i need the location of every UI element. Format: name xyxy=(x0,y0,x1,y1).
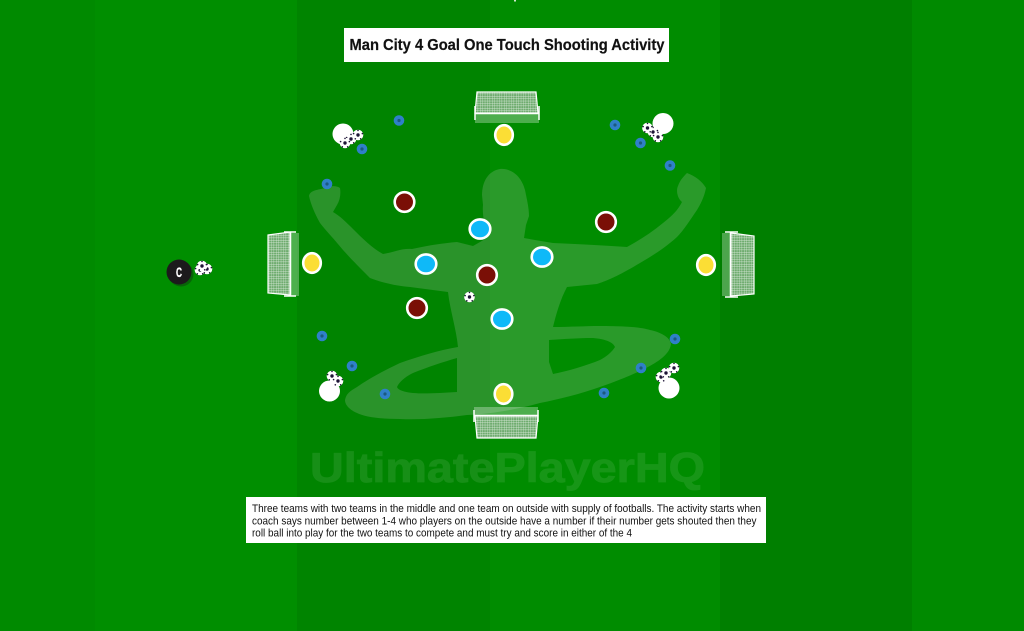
coach with balls xyxy=(166,260,212,286)
goal: right xyxy=(722,232,754,297)
goal: left xyxy=(268,232,299,296)
maroon team xyxy=(395,192,616,318)
description text box: roll ball into play for the two teams to compete and must try and score in either of the 4 xyxy=(252,528,632,540)
description text box: Three teams with two teams in the middle and one team on outside with supply of footballs. The activity starts when xyxy=(252,503,761,515)
watermark: player silhouette xyxy=(309,169,706,419)
description text box xyxy=(246,497,766,543)
outside player: top right with balls xyxy=(642,113,674,142)
goal: bottom xyxy=(474,407,538,438)
outside player: bottom right with balls xyxy=(656,363,680,398)
goal: top xyxy=(475,92,539,123)
description text box: coach says number between 1-4 who players on the outside have a number if their number gets shouted then they xyxy=(252,516,757,528)
watermark: UltimatePlayerHQ: UltimatePlayerHQ xyxy=(310,444,705,491)
blue team xyxy=(416,219,552,329)
match ball xyxy=(464,292,475,302)
title xyxy=(344,28,669,62)
outside player: bottom left with balls xyxy=(319,371,343,402)
title: Man City 4 Goal One Touch Shooting Activity xyxy=(350,37,665,54)
coach with balls: C xyxy=(176,264,182,280)
cones xyxy=(317,115,680,399)
outside player: top left with balls xyxy=(332,124,363,148)
yellow team: goalkeepers xyxy=(303,125,715,404)
